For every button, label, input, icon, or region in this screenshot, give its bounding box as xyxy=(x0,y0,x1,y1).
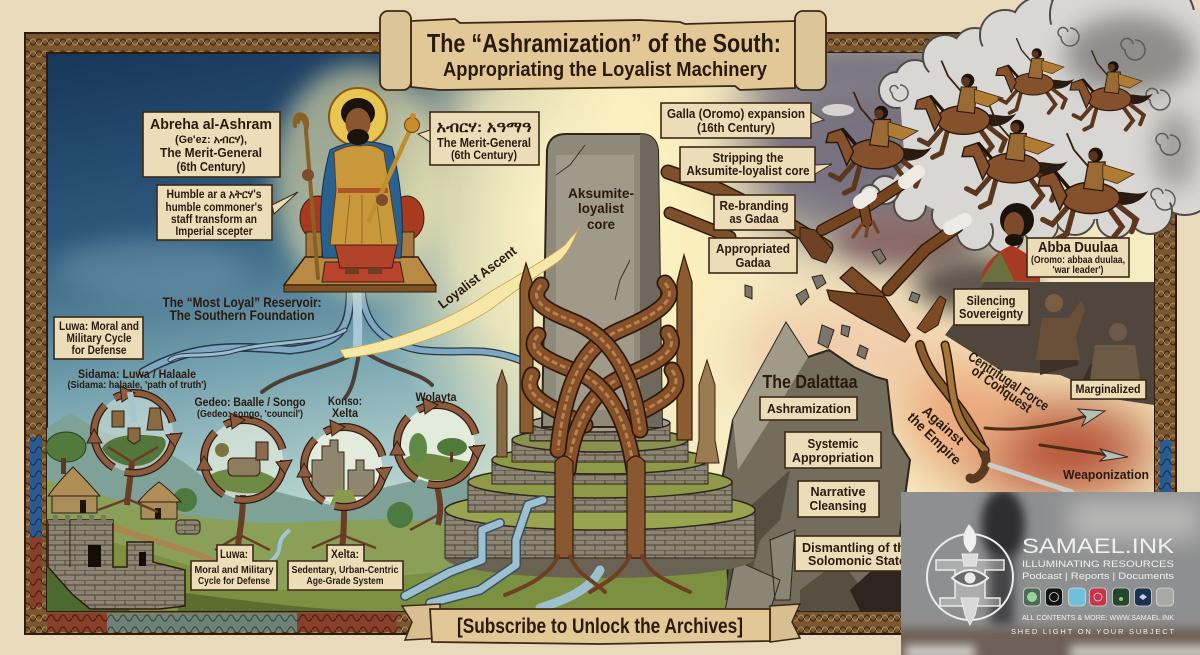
callout: Abreha al-Ashram xyxy=(143,112,280,177)
well xyxy=(176,520,200,534)
callout: marginalized xyxy=(1071,380,1146,399)
panel: marginalized figures xyxy=(945,282,1154,405)
portrait: Abba Duulaa xyxy=(980,203,1040,282)
callout: Galla expansion xyxy=(661,103,824,138)
label: Konso: Xelta xyxy=(332,406,358,420)
icon: side spires xyxy=(497,360,719,463)
callout: Abba Duulaa: Abba Duulaa xyxy=(1038,240,1119,256)
label: against the empire: the Empire xyxy=(904,409,965,468)
callout: stripping xyxy=(680,147,832,182)
heading: southern foundation: The Southern Foundation xyxy=(170,308,314,323)
label: Sidama xyxy=(68,367,206,391)
callout: humble staff: Humble ar a አትርሃ's xyxy=(166,189,262,201)
callout: Xelta definition: Xelta: xyxy=(331,547,359,561)
arrow: loyalist ascent: Loyalist Ascent xyxy=(435,243,520,312)
callout: Narrative Cleansing: Cleansing xyxy=(810,498,867,513)
monolith: Aksumite-loyalist core: Aksumite- xyxy=(568,185,634,201)
motto: SHED LIGHT ON YOUR SUBJECT xyxy=(1011,627,1174,636)
callout: humble staff: humble commoner's xyxy=(166,202,262,214)
callout: humble staff: Imperial scepter xyxy=(176,226,253,238)
callout: Xelta definition xyxy=(288,545,403,590)
callout: Amharic name: The Merit-General xyxy=(437,136,531,150)
title line 2: Appropriating the Loyalist Machinery xyxy=(443,59,768,81)
callout: Luwa moral and military xyxy=(54,317,143,359)
callout: Dismantling xyxy=(795,536,920,571)
label: centrifugal force of conquest: Centrifugal Force xyxy=(965,348,1052,414)
icon: huts xyxy=(48,467,181,519)
monolith: Aksumite-loyalist core: loyalist xyxy=(578,200,624,216)
callout: appropriated xyxy=(709,238,797,273)
roots: southern reservoir blue channels xyxy=(143,292,520,398)
callout: Luwa moral and military: Military Cycle xyxy=(66,333,132,345)
contact line: ALL CONTENTS & MORE: WWW.SAMAEL.INK xyxy=(1022,613,1174,622)
label: Wolayta: Wolayta xyxy=(416,390,457,404)
monolith: Aksumite-loyalist core: core xyxy=(587,216,615,232)
callout: Narrative Cleansing: Narrative xyxy=(810,484,866,499)
heading: The Dalattaa: The Dalattaa xyxy=(762,372,858,392)
callout: Xelta definition: Sedentary, Urban-Centric xyxy=(292,564,399,576)
title scroll xyxy=(380,11,826,90)
callout: Amharic name: (6th Century) xyxy=(451,148,517,162)
arrow: loyalist ascent xyxy=(340,226,580,358)
head xyxy=(341,98,375,145)
callout: Dismantling: Dismantling of the xyxy=(802,540,912,555)
icon: imperial scepter xyxy=(368,113,420,222)
callout: Abba Duulaa: 'war leader') xyxy=(1052,265,1104,276)
callout: Systemic Appropriation xyxy=(785,432,881,468)
clouds xyxy=(822,0,1200,253)
cycle: Konso city xyxy=(297,420,392,548)
woven wooden straps xyxy=(530,283,676,470)
icon: stone fort xyxy=(48,515,185,609)
callout: Ashramization xyxy=(760,397,857,420)
hands xyxy=(302,169,388,206)
heading: southern foundation xyxy=(162,294,322,323)
icon: halo xyxy=(329,88,387,146)
callout: Abba Duulaa xyxy=(1027,238,1129,277)
callout: stripping: Stripping the xyxy=(712,150,784,165)
broken wood and debris xyxy=(745,227,946,359)
platform xyxy=(284,257,436,292)
callout: Narrative Cleansing xyxy=(798,481,879,517)
callout: re-branding xyxy=(714,195,795,230)
callout: humble staff xyxy=(157,185,298,240)
label: weaponization: Weaponization xyxy=(1063,467,1149,482)
callout: Dismantling: Solomonic State xyxy=(808,553,906,568)
label: Gedeo: Gedeo: Baalle / Songo xyxy=(194,395,306,409)
robe xyxy=(330,145,398,274)
icon: shepherd staff xyxy=(295,114,318,278)
callout: Xelta definition: Age-Grade System xyxy=(306,575,384,587)
callout: Amharic name: አብርሃ: አዓማዓ xyxy=(436,119,532,136)
callout: Abreha al-Ashram: (Ge'ez: አብርሃ), xyxy=(175,134,247,146)
cycle: Wolayta grove xyxy=(390,398,485,530)
blue cloak xyxy=(321,142,402,258)
panel: Samael.ink brand card xyxy=(880,489,1200,655)
icon: eye and torch logo xyxy=(927,525,1013,625)
callout: silencing sovereignty: Silencing xyxy=(966,293,1016,308)
callout: appropriated: Gadaa xyxy=(736,255,771,270)
callout: Systemic Appropriation: Appropriation xyxy=(792,450,874,465)
banner: subscribe: [Subscribe to Unlock the Archives] xyxy=(457,615,743,638)
brand name: SAMAEL.INK xyxy=(1022,535,1174,558)
label: against the empire: Against xyxy=(919,403,968,448)
rock: The Dalattaa xyxy=(722,323,915,611)
monolith: Aksumite-loyalist core xyxy=(542,134,662,427)
heading: southern foundation: The “Most Loyal” Reservoir: xyxy=(162,294,322,310)
cycle: Sidama tree xyxy=(87,386,182,512)
content types: Podcast | Reports | Documents xyxy=(1022,571,1174,582)
label: Sidama: Sidama: Luwa / Halaale xyxy=(78,367,196,381)
callout: Abreha al-Ashram: The Merit-General xyxy=(160,145,262,160)
callout: Abba Duulaa: (Oromo: abbaa duulaa, xyxy=(1031,255,1125,266)
callout: Systemic Appropriation: Systemic xyxy=(808,436,858,451)
panel: landscape hills xyxy=(46,413,740,611)
callout: Galla expansion: Galla (Oromo) expansion xyxy=(667,106,805,121)
callout: stripping: Aksumite-loyalist core xyxy=(686,163,810,178)
callout: Luwa definition xyxy=(191,545,277,590)
label: Konso xyxy=(328,394,362,420)
label: Sidama: (Sidama: halaale, 'path of truth') xyxy=(68,379,206,391)
tagline: ILLUMINATING RESOURCES xyxy=(1022,559,1174,570)
cycle: Gedeo village xyxy=(197,413,292,550)
front root posts xyxy=(505,456,690,595)
panel: Abreha throne and figure xyxy=(273,65,443,295)
label: Konso: Konso: xyxy=(328,394,362,408)
callout: silencing sovereignty xyxy=(954,289,1029,325)
posts xyxy=(520,255,692,440)
callout: Galla expansion: (16th Century) xyxy=(697,120,775,135)
waterfalls xyxy=(405,500,600,608)
callout: re-branding: as Gadaa xyxy=(730,211,779,226)
icon: arrowheads xyxy=(1078,409,1128,461)
callout: silencing sovereignty: Sovereignty xyxy=(959,306,1024,321)
callout: Amharic name xyxy=(418,112,539,165)
callout: humble staff: staff transform an xyxy=(171,214,257,226)
callout: Luwa moral and military: Luwa: Moral and xyxy=(59,321,139,333)
label: Gedeo: (Gedeo: songo, 'council') xyxy=(197,408,303,420)
throne xyxy=(300,196,424,262)
arms reaching from clouds xyxy=(822,172,965,290)
tree xyxy=(46,432,86,474)
callout: Luwa definition: Luwa: xyxy=(220,547,248,561)
wood: stripped strands upper xyxy=(668,172,826,247)
callout: Abreha al-Ashram: (6th Century) xyxy=(176,160,246,174)
callout: Luwa definition: Moral and Military xyxy=(194,564,274,576)
wood braid and weapons xyxy=(920,345,1115,492)
label: Gedeo xyxy=(194,395,306,420)
callout: Ashramization: Ashramization xyxy=(767,401,851,416)
label: centrifugal force of conquest: of Conquest xyxy=(969,362,1035,416)
platform icons xyxy=(1024,588,1174,606)
banner: subscribe xyxy=(402,604,800,644)
callout: re-branding: Re-branding xyxy=(720,198,789,213)
callout: Abreha al-Ashram: Abreha al-Ashram xyxy=(150,116,272,133)
callout: appropriated: Appropriated xyxy=(716,241,790,256)
callout: Luwa moral and military: for Defense xyxy=(72,345,126,357)
title line 1: The “Ashramization” of the South: xyxy=(427,28,781,58)
callout: marginalized: Marginalized xyxy=(1076,382,1140,396)
horsemen xyxy=(826,38,1153,239)
tower: stepped stone foundation xyxy=(445,414,755,578)
callout: Luwa definition: Cycle for Defense xyxy=(198,575,270,587)
